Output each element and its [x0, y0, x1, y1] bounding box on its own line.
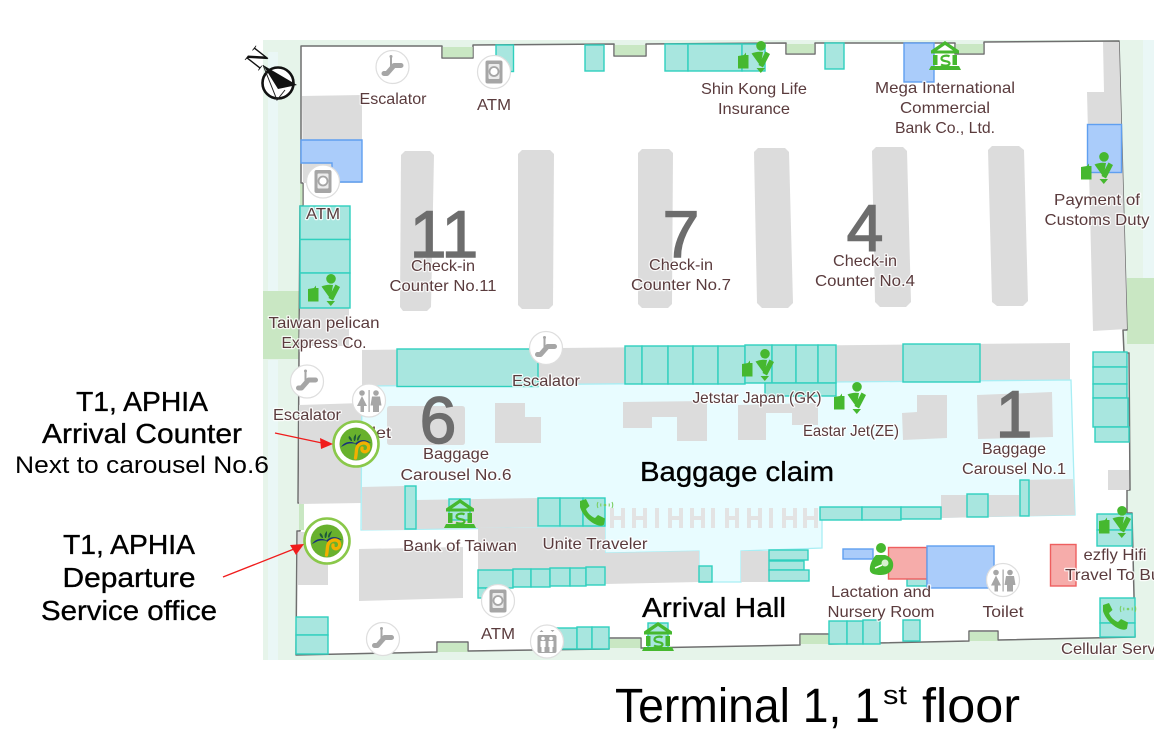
label: Mega International: Mega International — [875, 80, 1015, 97]
label: ATM west: ATM — [306, 206, 340, 223]
lower gray areas — [362, 479, 1075, 589]
callout: arrival counter: Next to carousel No.6 — [15, 452, 269, 479]
icon: Shin Kong Life service — [738, 41, 770, 73]
label: ezfly Hifi: ezfly Hifi — [1084, 547, 1146, 564]
label: Bank Co., Ltd.: Bank Co., Ltd. — [895, 120, 995, 137]
label: Payment of: Payment of — [1054, 192, 1141, 209]
label: baggage 6: Baggage — [423, 446, 489, 463]
label: Lactation and: Lactation and — [831, 584, 931, 601]
callout: arrival counter — [15, 386, 269, 479]
number 4: 4 — [847, 191, 883, 265]
icon: elevator — [530, 625, 564, 658]
immigration lanes — [610, 508, 818, 528]
icon: customs payment service — [1081, 152, 1113, 184]
label: counter 4: Counter No.4 — [815, 273, 915, 290]
check-in counter islands — [400, 146, 1028, 311]
number 11: 11 — [410, 197, 478, 271]
label: baggage 1: Baggage — [982, 441, 1046, 458]
icon: toilet east — [986, 564, 1020, 596]
label: cellular service: Cellular Service — [1061, 641, 1172, 658]
icon: escalator centre — [530, 332, 562, 364]
label: carousel 1: Carousel No.1 — [962, 461, 1066, 478]
label: toilet west: Toilet — [349, 425, 392, 442]
label: Insurance: Insurance — [718, 101, 790, 118]
heading: Arrival Hall: Arrival Hall — [642, 592, 786, 623]
map background — [263, 40, 1154, 660]
compass: N — [239, 41, 275, 75]
map place labels — [268, 80, 1172, 658]
icon: ATM west — [306, 165, 340, 198]
label: counter 11: Counter No.11 — [390, 278, 497, 295]
compass — [239, 41, 297, 100]
APHIA logo: departure office — [304, 518, 350, 564]
number 1: 1 — [996, 377, 1032, 451]
icon: ATM south — [482, 584, 514, 618]
wayfinding circle icons — [290, 50, 1020, 658]
title: Terminal 1, 1st floor — [615, 680, 1020, 733]
baggage claim floor — [361, 380, 1075, 582]
label: escalator north: Escalator — [360, 91, 427, 108]
label: ATM north: ATM — [477, 97, 511, 114]
icon: Bank of Taiwan — [444, 499, 476, 528]
callout: arrival counter: Arrival Counter — [42, 418, 242, 449]
number 6: 6 — [420, 383, 456, 457]
teal shop units — [296, 43, 1135, 654]
callout: departure service office: Service office — [41, 595, 217, 626]
label: Bank of Taiwan: Bank of Taiwan — [403, 538, 517, 555]
label: Express Co.: Express Co. — [282, 335, 366, 352]
icon: toilet west — [352, 384, 386, 417]
icon: Eastar Jet service — [834, 382, 866, 414]
callout: arrival counter: T1, APHIA — [76, 386, 208, 417]
heading: Baggage claim: Baggage claim — [640, 456, 834, 487]
label: escalator west: Escalator — [273, 407, 342, 424]
label: Travel To Bu: Travel To Bus — [1065, 567, 1169, 584]
icon: ATM north — [478, 56, 510, 88]
label: check-in 7: Check-in — [649, 257, 713, 274]
callout: departure service office: Departure — [62, 562, 196, 593]
title: Terminal 1, 1st floor: Terminal 1, 1 — [615, 680, 880, 733]
icon: Jetstar service — [742, 349, 774, 381]
label: check-in 4: Check-in — [833, 253, 897, 270]
icon: escalator west — [290, 365, 324, 398]
blue and red units — [301, 43, 1122, 588]
arrow to arrival counter — [275, 433, 333, 449]
icon: escalator south — [366, 622, 400, 656]
baggage carousels — [387, 392, 1053, 445]
title: Terminal 1, 1st floor: floor — [922, 680, 1020, 733]
label: check-in 11: Check-in — [411, 258, 475, 275]
large counter and carousel numbers — [410, 191, 1032, 457]
label: carousel 6: Carousel No.6 — [400, 467, 512, 484]
top and side gray service areas — [298, 42, 1129, 601]
icon: Taiwan pelican service — [308, 274, 340, 306]
icon: Unite Traveler phone — [580, 499, 613, 526]
icon: cellular service phone — [1103, 603, 1136, 630]
label: ATM south: ATM — [481, 626, 515, 643]
callout: departure service office: T1, APHIA — [63, 529, 195, 560]
callout: departure service office — [41, 529, 217, 626]
label: Eastar Jet: Eastar Jet(ZE) — [803, 423, 899, 440]
wall window strips — [299, 44, 997, 652]
title: Terminal 1, 1st floor: st — [883, 680, 908, 710]
icon: arrival hall bank — [642, 622, 674, 651]
label: Jetstar Japan: Jetstar Japan (GK) — [692, 390, 822, 407]
label: toilet east: Toilet — [982, 604, 1024, 621]
icon: Mega bank — [929, 41, 961, 70]
label: Taiwan pelican: Taiwan pelican — [268, 315, 380, 332]
building floor outline — [296, 41, 1135, 655]
icon: nursery — [870, 543, 893, 575]
label: Customs Duty: Customs Duty — [1044, 212, 1150, 229]
icon: ezfly service — [1099, 506, 1131, 538]
arrow to departure office — [223, 544, 304, 577]
label: Unite Traveler: Unite Traveler — [542, 536, 648, 553]
label: Commercial: Commercial — [900, 100, 990, 117]
label: Shin Kong Life: Shin Kong Life — [701, 81, 807, 98]
service icons — [308, 41, 1136, 651]
icon: escalator north — [376, 50, 409, 84]
label: counter 7: Counter No.7 — [631, 277, 731, 294]
APHIA logo: arrival counter — [334, 422, 378, 466]
label: escalator centre: Escalator — [512, 373, 581, 390]
number 7: 7 — [663, 197, 699, 271]
label: Nursery Room: Nursery Room — [828, 604, 934, 621]
